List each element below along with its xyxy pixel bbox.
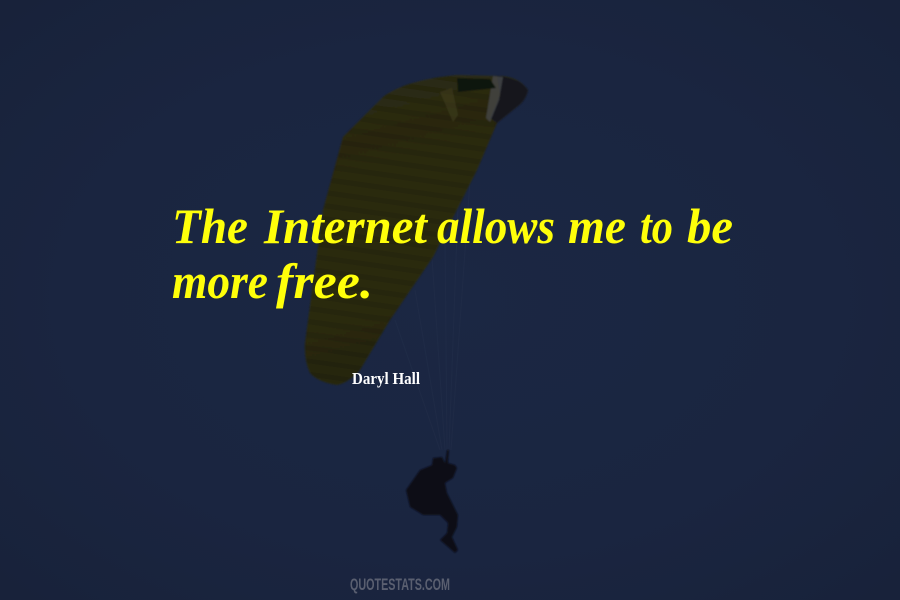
author name: Daryl Hall [352, 369, 420, 388]
icon: paraglider canopy [305, 75, 528, 385]
quote line 1 [172, 198, 733, 254]
quote line 1: allows [437, 198, 555, 254]
quote line 1: to [640, 198, 673, 254]
quote line 1: be [687, 198, 733, 254]
quote line 2 [172, 253, 373, 309]
canopy nose [490, 76, 528, 123]
parachute lines [395, 180, 470, 450]
quote text [172, 198, 733, 309]
watermark: QUOTESTATS.COM [350, 575, 450, 594]
quote line 2: more [172, 253, 268, 309]
quote line 1: me [568, 198, 626, 254]
quote line 1: The [172, 198, 248, 254]
quote line 2: free. [276, 253, 373, 309]
icon: parachutist silhouette [406, 450, 458, 553]
quote line 1: Internet [263, 198, 429, 254]
